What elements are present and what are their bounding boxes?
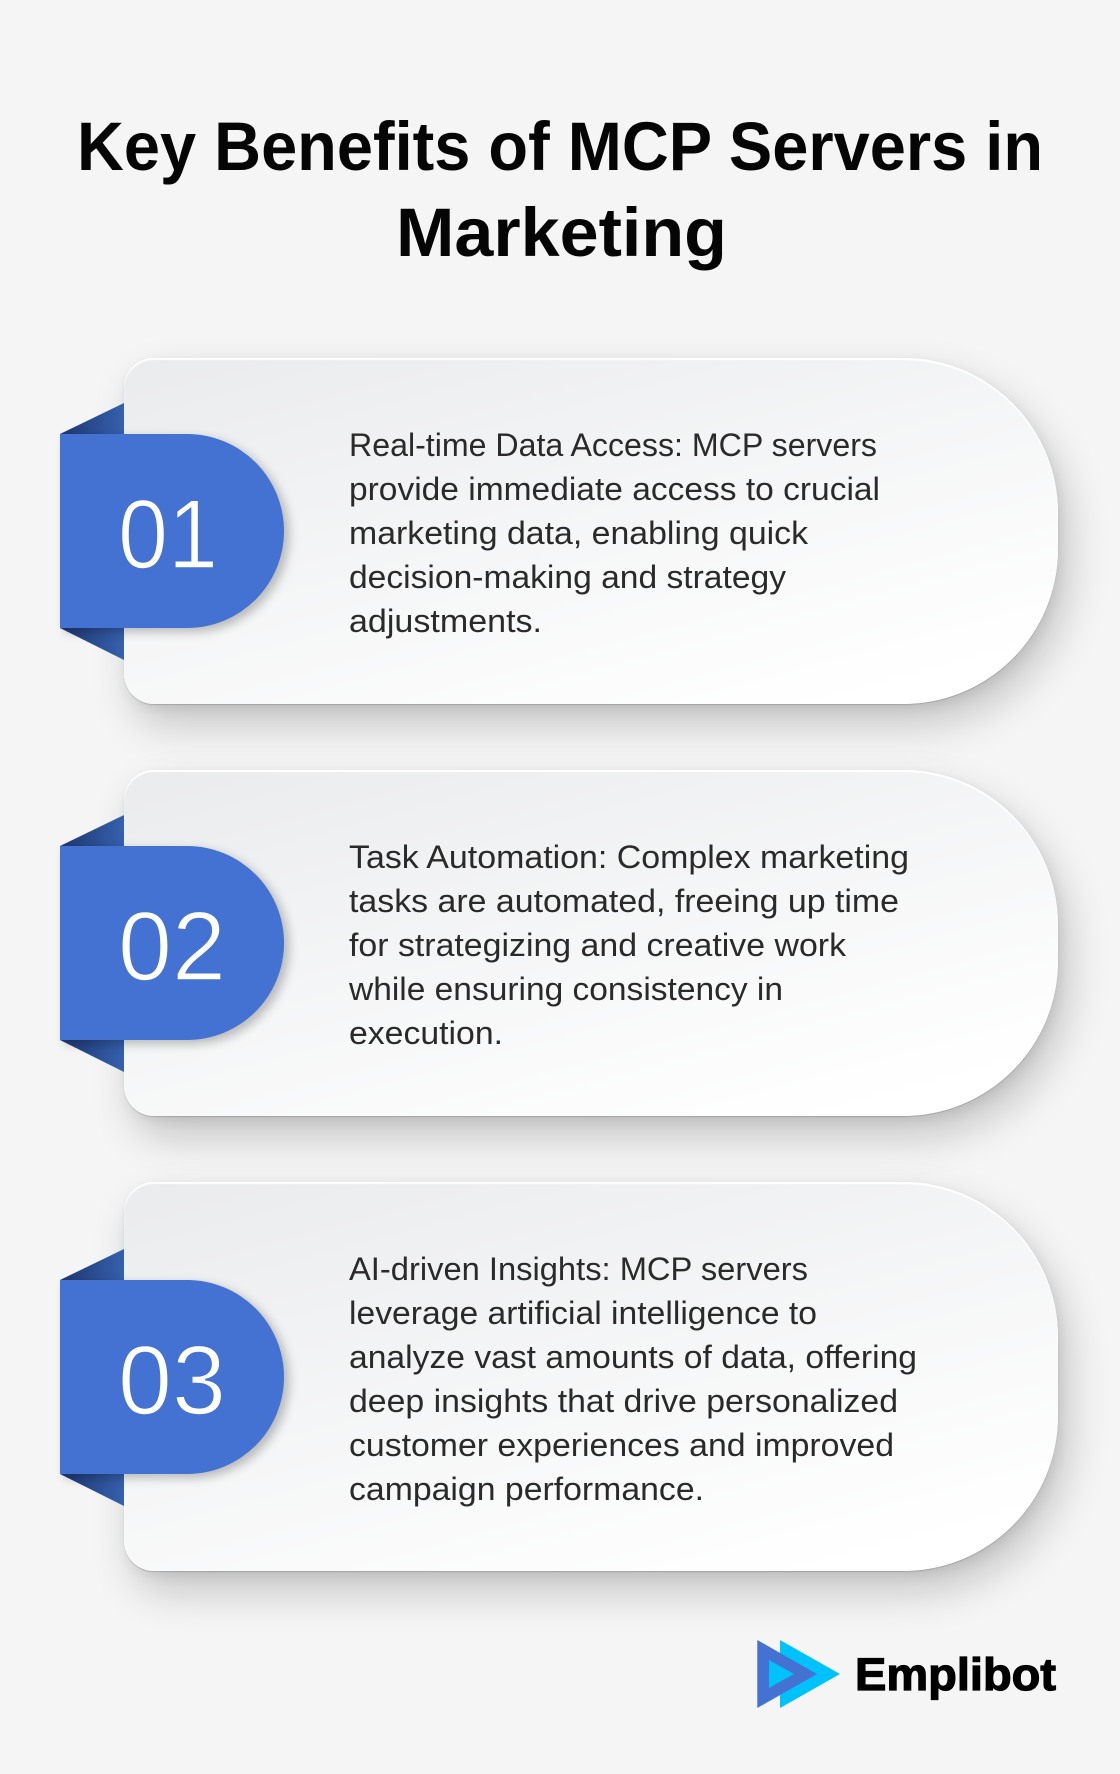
text: AI-driven insights: campaign performance. (348, 1471, 703, 1507)
card background (124, 770, 1058, 1116)
text: task automation: while ensuring consistency in (347, 971, 783, 1007)
text: task automation: execution. (348, 1015, 502, 1051)
text: AI-driven insights: leverage artificial intelligence to (348, 1295, 816, 1331)
text: task automation: for strategizing and creative work (348, 927, 847, 963)
text: real-time data access: Real-time Data Access: MCP servers (348, 427, 876, 463)
text: task automation (347, 839, 908, 1051)
panel: benefit 03 AI-driven insights (60, 1180, 1087, 1610)
text: real-time data access: decision-making and strategy (348, 559, 786, 595)
ribbon folds (60, 1249, 124, 1506)
text: real-time data access: provide immediate access to crucial (348, 471, 880, 507)
text: AI-driven insights (348, 1251, 916, 1507)
text: AI-driven insights: AI-driven Insights: MCP servers (348, 1251, 807, 1287)
card background (124, 1182, 1058, 1571)
logo: Emplibot (757, 1640, 1056, 1708)
panel: benefit 02 task automation (60, 768, 1087, 1155)
title: Key Benefits of MCP Servers in (77, 108, 1043, 185)
ribbon folds (60, 815, 124, 1072)
text: task automation: tasks are automated, freeing up time (348, 883, 898, 919)
text: AI-driven insights: analyze vast amounts of data, offering (348, 1339, 916, 1375)
number badge 03: 03 (118, 1325, 226, 1435)
logo: Emplibot: Emplibot (855, 1649, 1056, 1700)
card background (124, 358, 1058, 704)
panel: benefit 01 real-time data access (60, 356, 1087, 743)
number badge 02: 02 (118, 891, 226, 1001)
text: task automation: Task Automation: Complex marketing (348, 839, 908, 875)
text: real-time data access: marketing data, enabling quick (348, 515, 809, 551)
text: AI-driven insights: deep insights that drive personalized (348, 1383, 898, 1419)
number badge 01: 01 (118, 479, 218, 589)
text: real-time data access (348, 427, 880, 639)
title (77, 108, 1043, 271)
number badge 01 (60, 434, 284, 628)
ribbon folds (60, 403, 124, 660)
title: Marketing (396, 194, 727, 271)
text: real-time data access: adjustments. (348, 603, 542, 639)
text: AI-driven insights: customer experiences and improved (348, 1427, 894, 1463)
number badge 02 (60, 846, 284, 1040)
number badge 03 (60, 1280, 284, 1474)
